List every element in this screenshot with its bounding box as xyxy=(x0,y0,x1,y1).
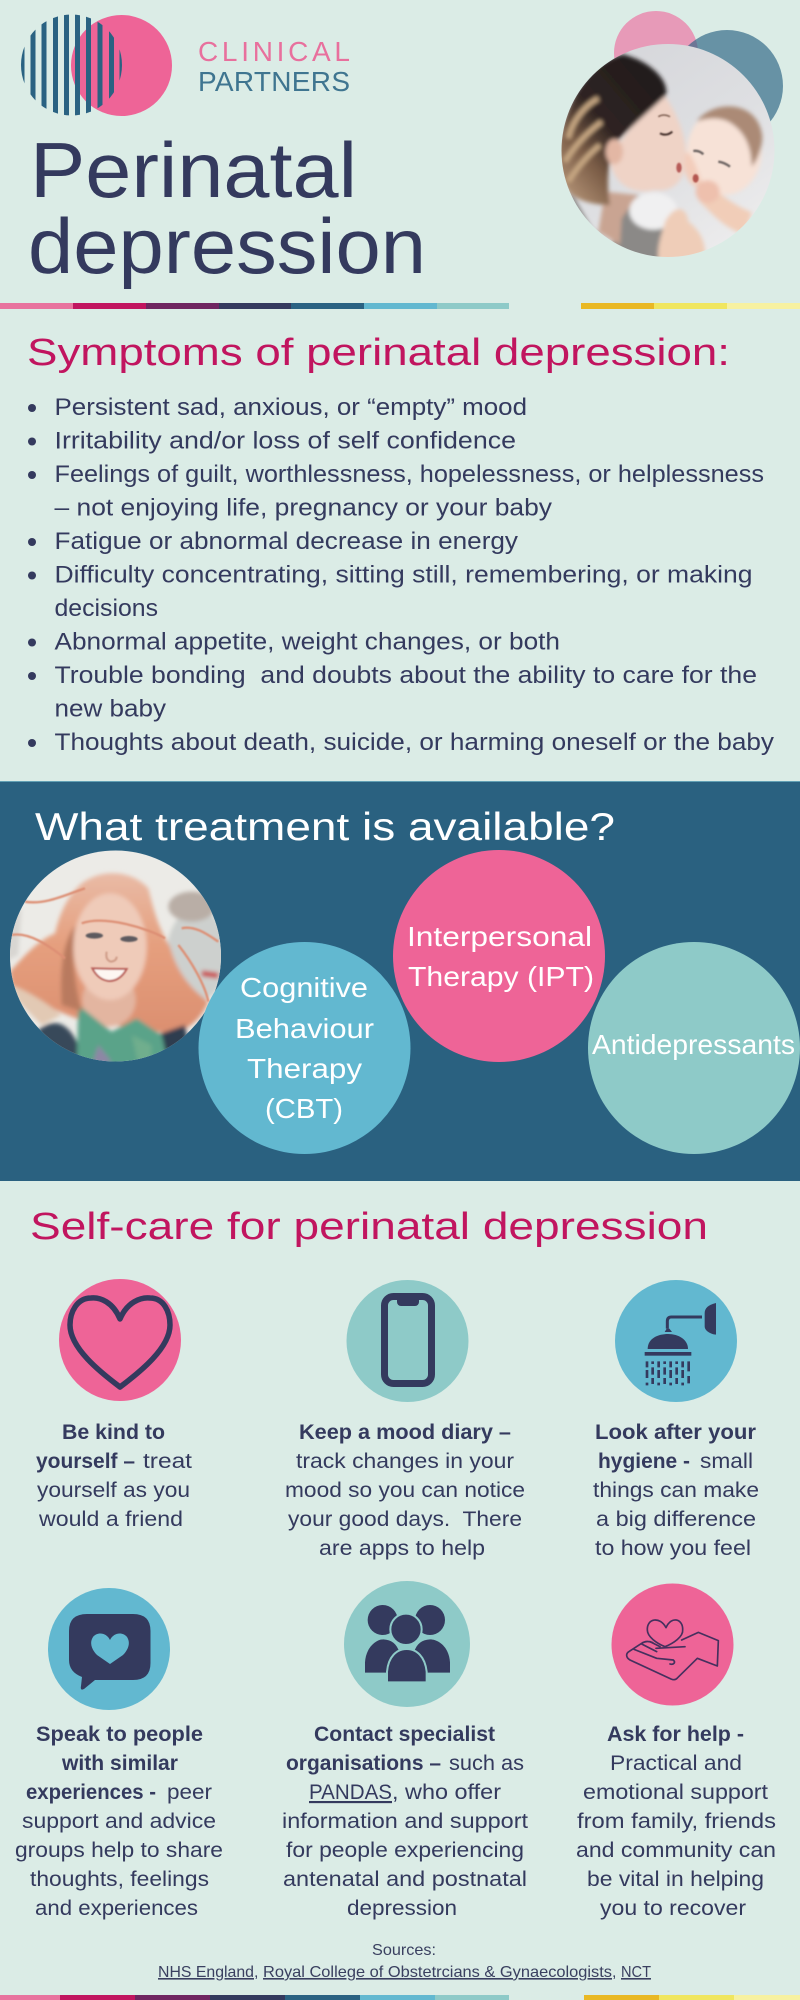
item: ask for help xyxy=(576,1584,776,1920)
text: be kind: yourself – xyxy=(36,1449,135,1473)
symptoms list: Persistent sad, anxious, or “empty” mood xyxy=(54,394,527,421)
text: ask for help: Ask for help - xyxy=(607,1722,744,1746)
sources: NCT xyxy=(621,1964,651,1981)
text: ask for help: and community can xyxy=(576,1838,776,1862)
text: mood diary: mood so you can notice xyxy=(285,1478,525,1502)
text: hygiene: Look after your xyxy=(595,1420,757,1444)
circle: antidepressants: Antidepressants xyxy=(592,1029,795,1060)
title xyxy=(28,126,426,290)
sources: Royal College of Obstetrcians & Gynaecologists xyxy=(263,1964,612,1981)
icon: shower xyxy=(615,1280,737,1402)
symptoms list: Difficulty concentrating, sitting still, remembering, or making xyxy=(54,562,752,588)
text: speak to people: experiences - xyxy=(26,1780,156,1804)
text: specialist organisations: organisations – xyxy=(286,1751,441,1775)
text: hygiene: things can make xyxy=(593,1478,759,1502)
panel: treatment xyxy=(0,781,800,1181)
text: mood diary xyxy=(285,1420,525,1560)
sources: NHS England xyxy=(158,1964,254,1981)
sources: , xyxy=(254,1964,258,1981)
text: ask for help: Practical and xyxy=(610,1751,742,1775)
text: specialist organisations: for people experiencing xyxy=(286,1838,524,1862)
circle: antidepressants xyxy=(588,942,800,1154)
text: hygiene: small xyxy=(700,1449,753,1473)
symptoms list: Abnormal appetite, weight changes, or both xyxy=(54,628,560,656)
text: ask for help xyxy=(576,1722,776,1920)
text: ask for help: you to recover xyxy=(600,1896,746,1920)
text: speak to people: Speak to people xyxy=(36,1722,203,1746)
text: hygiene: hygiene - xyxy=(598,1449,690,1473)
text: ask for help: be vital in helping xyxy=(587,1867,764,1891)
text: mood diary: your good days. There xyxy=(288,1507,522,1531)
text: speak to people: with similar xyxy=(61,1751,179,1775)
logo wordmark xyxy=(198,36,350,97)
text: hygiene xyxy=(593,1420,759,1560)
text: specialist organisations: Contact specialist xyxy=(314,1722,495,1746)
text: speak to people: thoughts, feelings xyxy=(30,1867,209,1891)
circle: CBT xyxy=(198,942,410,1154)
colour stripe: top xyxy=(0,303,800,309)
symptoms list: decisions xyxy=(54,595,158,622)
title: depression xyxy=(28,202,426,290)
photo: mother kissing baby xyxy=(562,44,774,257)
heading: symptoms: Symptoms of perinatal depression: xyxy=(27,332,730,374)
colour stripe: bottom xyxy=(0,1995,800,2000)
text: be kind: would a friend xyxy=(38,1507,183,1531)
text: hygiene: to how you feel xyxy=(595,1536,751,1560)
symptoms list xyxy=(28,394,774,756)
symptoms list: Fatigue or abnormal decrease in energy xyxy=(54,528,518,555)
sources: Sources: xyxy=(372,1942,436,1959)
circle: CBT: Behaviour xyxy=(235,1013,374,1044)
text: specialist organisations: , who offer xyxy=(392,1780,501,1804)
text: be kind xyxy=(36,1420,192,1531)
text: mood diary: Keep a mood diary – xyxy=(299,1420,511,1444)
text: speak to people: groups help to share xyxy=(15,1838,223,1862)
text: specialist organisations: PANDAS xyxy=(309,1780,392,1804)
text: specialist organisations: information and support xyxy=(282,1809,528,1833)
text: mood diary: are apps to help xyxy=(319,1536,485,1560)
circle: CBT: Cognitive xyxy=(240,972,368,1003)
bullet markers xyxy=(28,404,36,747)
circle: IPT xyxy=(393,850,605,1062)
icon: heart xyxy=(59,1279,181,1401)
logo: Clinical Partners xyxy=(21,14,350,116)
text: speak to people xyxy=(15,1722,223,1920)
text: be kind: yourself as you xyxy=(37,1478,190,1502)
text: speak to people: and experiences xyxy=(35,1896,198,1920)
title: Perinatal xyxy=(30,126,357,214)
text: specialist organisations: such as xyxy=(449,1751,524,1775)
sources: , xyxy=(612,1964,616,1981)
text: speak to people: support and advice xyxy=(22,1809,216,1833)
logo mark xyxy=(21,14,172,116)
text: ask for help: emotional support xyxy=(583,1780,768,1804)
circle: CBT: Therapy xyxy=(247,1053,362,1084)
logo wordmark: CLINICAL xyxy=(198,36,350,67)
text: hygiene: a big difference xyxy=(596,1507,756,1531)
symptoms list: Trouble bonding and doubts about the ability to care for the xyxy=(54,662,757,689)
icon: group of people xyxy=(344,1581,470,1707)
text: ask for help: from family, friends xyxy=(577,1809,776,1833)
item: be kind to yourself xyxy=(36,1279,192,1531)
text: specialist organisations xyxy=(282,1722,528,1920)
item: hygiene xyxy=(593,1280,759,1560)
icon: phone xyxy=(346,1280,468,1402)
text: be kind: Be kind to xyxy=(62,1420,165,1444)
text: specialist organisations: depression xyxy=(347,1896,457,1920)
photo: smiling woman xyxy=(10,850,221,1062)
heading: treatment: What treatment is available? xyxy=(35,806,615,849)
decorative circles and photo: mother and baby xyxy=(555,11,785,265)
logo wordmark: PARTNERS xyxy=(198,66,350,97)
item: mood diary xyxy=(285,1280,525,1560)
symptoms list: Thoughts about death, suicide, or harming oneself or the baby xyxy=(54,729,774,756)
text: mood diary: track changes in your xyxy=(296,1449,514,1473)
circle: IPT: Therapy (IPT) xyxy=(408,961,594,992)
symptoms list: new baby xyxy=(54,696,166,722)
sources xyxy=(158,1942,651,1981)
symptoms list: – not enjoying life, pregnancy or your baby xyxy=(54,494,552,522)
circle: CBT: (CBT) xyxy=(265,1093,343,1124)
text: specialist organisations: antenatal and postnatal xyxy=(283,1867,527,1891)
item: speak to people xyxy=(15,1588,223,1920)
text: be kind: treat xyxy=(143,1449,192,1473)
icon: speech bubble with heart xyxy=(48,1588,170,1710)
text: speak to people: peer xyxy=(167,1780,212,1804)
item: specialist organisations xyxy=(282,1581,528,1920)
symptoms list: Feelings of guilt, worthlessness, hopelessness, or helplessness xyxy=(54,461,764,488)
circle: IPT: Interpersonal xyxy=(407,921,592,952)
symptoms list: Irritability and/or loss of self confidence xyxy=(54,428,516,454)
icon: hand holding heart xyxy=(612,1584,734,1706)
heading: self-care: Self-care for perinatal depression xyxy=(30,1206,708,1248)
